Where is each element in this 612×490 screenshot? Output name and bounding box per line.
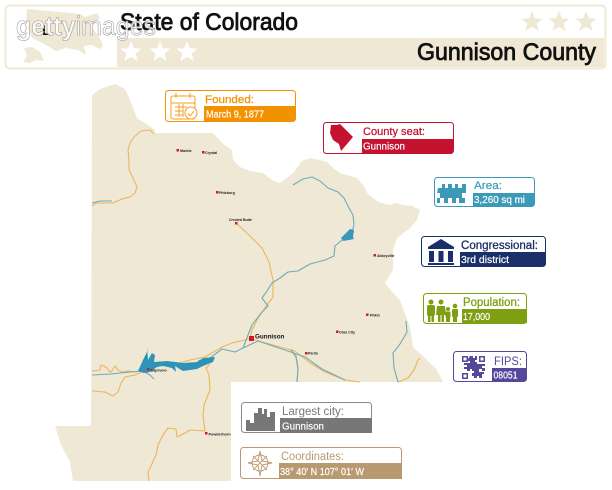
icon: QR code [462,356,485,379]
panel: population [424,294,527,324]
icon: compass [248,451,272,476]
panel: county seat: County seat: [363,126,425,138]
panel: area: Area: [474,180,502,192]
town: Crested Butte: Crested Butte [229,218,252,222]
panel: population: 17,000 [463,311,490,323]
stars: white [120,41,198,61]
panel: area [434,178,534,206]
icon: county shape [330,124,353,151]
icon: government building [428,239,454,265]
town: Pitkin: Pitkin [370,314,380,318]
panel: area: 3,260 sq mi [474,194,525,206]
panel: founded: Founded: [205,94,254,106]
panel: congressional [422,236,546,266]
icon: calendar [171,93,197,119]
panel: county seat [324,122,454,154]
town: Sapinero: Sapinero [150,368,167,372]
panel: founded [166,90,296,122]
stars: beige [522,11,596,31]
icon: skyline [246,408,275,431]
town: Crystal: Crystal [205,151,217,155]
town: Ohio City: Ohio City [339,330,355,334]
header band [117,38,604,67]
watermark: gettyimages [16,11,156,41]
panel: FIPS: 08051 [494,370,518,382]
town: Powderhorn: Powderhorn [208,432,231,436]
lake: Blue Mesa Reservoir [138,347,215,373]
town: Abbeyville: Abbeyville [377,254,395,258]
county shape [55,84,443,481]
icon: USA map silhouette [23,9,103,63]
town: Parlin: Parlin [308,352,318,356]
panel: largest city: Gunnison [282,420,324,432]
panel: FIPS [454,352,526,382]
panel: congressional: Congressional: [461,240,538,252]
icon: area grid [437,184,466,203]
panel: county seat: Gunnison [363,140,405,152]
town: Crested Butte [229,218,252,224]
panel: founded: March 9, 1877 [206,110,264,120]
panel: population: Population: [463,297,520,309]
map: Gunnison County [55,84,443,481]
header banner [6,6,606,68]
lake: Taylor Park Reservoir [341,229,354,241]
panel: largest city [242,402,372,433]
panel: coordinates: 38° 40′ N 107° 01′ W [280,466,364,478]
town: Marble: Marble [180,149,192,153]
panel: largest city: Largest city: [282,406,344,418]
city: Gunnison: Gunnison [255,334,285,340]
title: county: Gunnison County [417,39,596,66]
panel: FIPS: FIPS: [494,356,522,368]
panel: congressional: 3rd district [461,254,509,266]
title: state: State of Colorado [120,9,298,36]
roads [92,130,420,481]
town: Pittsburg: Pittsburg [219,191,235,195]
clipped letter: L [42,22,51,38]
icon: family [427,300,458,322]
panel: coordinates [240,448,402,479]
rivers [92,177,407,382]
panel: coordinates: Coordinates: [281,451,344,463]
